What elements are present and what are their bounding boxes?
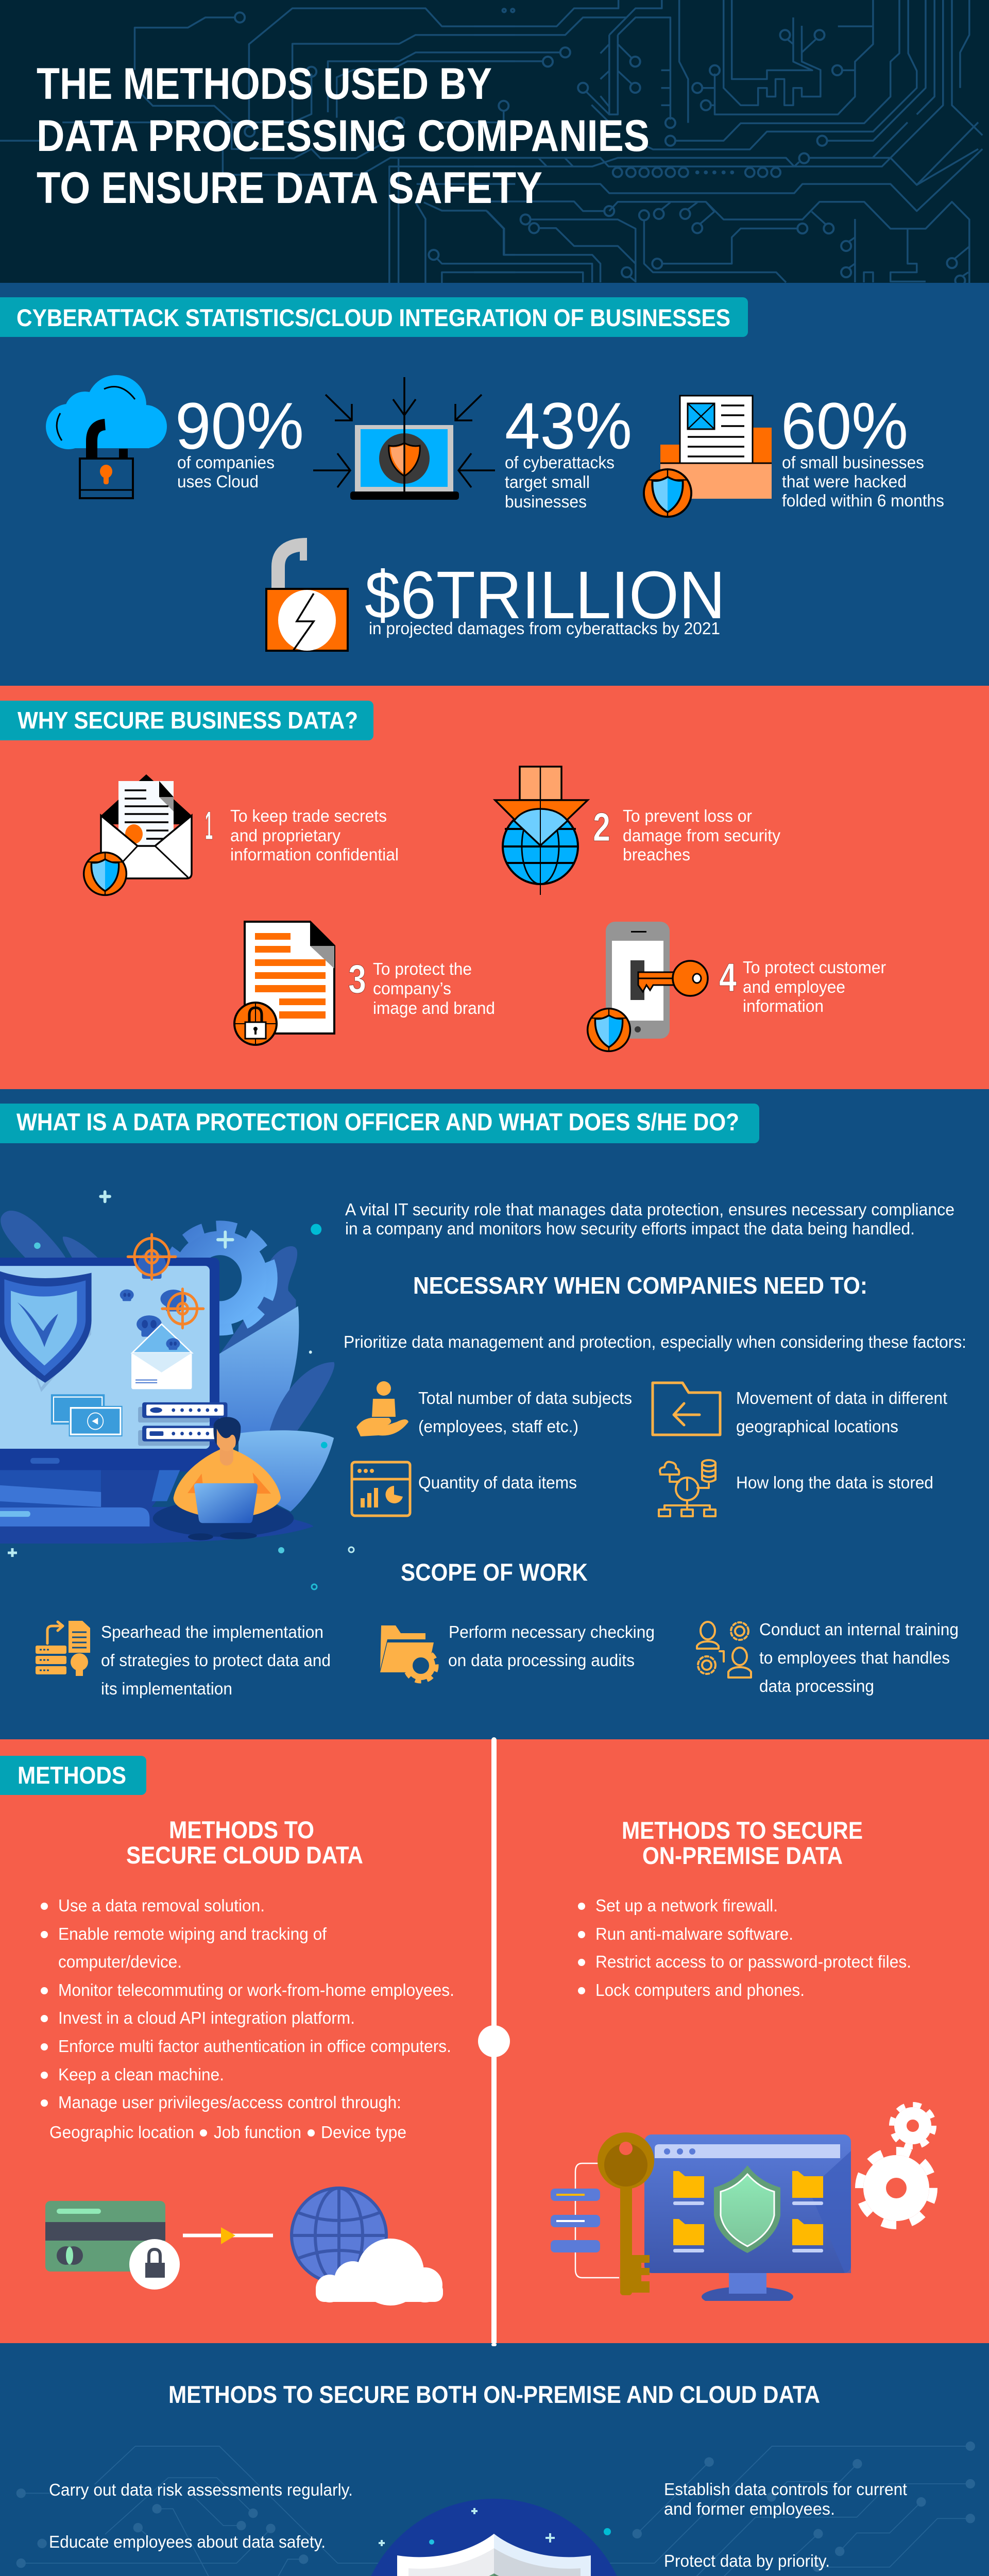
heading: methods to secure cloud data: SECURE CLOUD DATA xyxy=(126,1841,363,1869)
stat: $6 trillion: $6TRILLION xyxy=(365,557,725,633)
list: on-premise methods: Set up a network firewall. xyxy=(595,1896,778,1915)
heading: scope of work: SCOPE OF WORK xyxy=(401,1558,588,1586)
reason 4: and employee xyxy=(743,977,845,996)
factor: how long: How long the data is stored xyxy=(736,1473,933,1492)
heading: why secure banner xyxy=(0,701,373,740)
reason 4: information xyxy=(743,996,824,1015)
reason 2: breaches xyxy=(623,845,690,864)
icon: open padlock with lightning xyxy=(266,540,348,651)
reason 1: and proprietary xyxy=(230,826,340,845)
reason 4: 4 xyxy=(719,955,737,1000)
reason 3: 3 xyxy=(348,956,366,1002)
list: cloud data methods: Keep a clean machine. xyxy=(58,2065,224,2084)
heading: cyberattack statistics banner xyxy=(0,297,748,337)
list: cloud data methods: Monitor telecommuting or work-from-home employees. xyxy=(58,1980,454,1999)
heading: methods to secure both: METHODS TO SECURE BOTH ON-PREMISE AND CLOUD DATA xyxy=(168,2381,820,2408)
heading: data protection officer banner: WHAT IS A DATA PROTECTION OFFICER AND WHAT DOES S/HE DO? xyxy=(16,1108,739,1136)
reason 2: To prevent loss or xyxy=(623,806,752,825)
heading: cyberattack statistics banner: CYBERATTACK STATISTICS/CLOUD INTEGRATION OF BUSINESSES xyxy=(16,304,730,331)
icon: laptop under attack xyxy=(313,377,495,500)
text: role description: in a company and monitors how security efforts impact the data being handled. xyxy=(345,1219,915,1238)
reason 4 xyxy=(719,955,886,1015)
list: cloud data methods: Use a data removal solution. xyxy=(58,1896,265,1915)
heading: methods to secure cloud data xyxy=(126,1816,363,1869)
scope item: spearhead: its implementation xyxy=(101,1679,232,1698)
reason 1: To keep trade secrets xyxy=(230,806,387,825)
reason 4: To protect customer xyxy=(743,958,886,977)
reason 1: information confidential xyxy=(230,845,399,864)
list: on-premise methods xyxy=(578,1896,911,1999)
factor: quantity: Quantity of data items xyxy=(418,1473,577,1492)
heading: methods to secure on-premise data: ON-PREMISE DATA xyxy=(642,1842,843,1869)
stat: 90%: 90% xyxy=(175,389,304,463)
reason 1 xyxy=(205,803,399,864)
list: cloud data methods: Manage user privileges/access control through: xyxy=(58,2093,401,2112)
heading: methods to secure on-premise data: METHODS TO SECURE xyxy=(622,1817,863,1844)
list: cloud data methods: Enable remote wiping and tracking of xyxy=(58,1924,327,1943)
reason 3: image and brand xyxy=(373,998,495,1018)
factor: data subjects xyxy=(418,1388,632,1436)
icon: hacked document xyxy=(644,396,772,517)
scope item: internal training: to employees that handles xyxy=(759,1648,950,1667)
text: role description: A vital IT security role that manages data protection, ensures necessary compliance xyxy=(345,1200,954,1219)
text: role description xyxy=(345,1200,954,1238)
scope item: internal training: data processing xyxy=(759,1676,874,1696)
stat: 43% xyxy=(505,389,632,511)
stat: 60%: folded within 6 months xyxy=(782,491,944,510)
panel: methods for both on-premise and cloud data xyxy=(0,2343,989,2576)
stat: 43%: 43% xyxy=(505,389,632,463)
heading: methods banner xyxy=(0,1756,146,1795)
stat: 43%: of cyberattacks xyxy=(505,453,615,472)
scope item: perform checking: on data processing audits xyxy=(448,1651,635,1670)
scope item: perform checking: Perform necessary checking xyxy=(449,1622,655,1641)
icon: network with clock xyxy=(659,1460,715,1516)
text: prioritize: Prioritize data management and protection, especially when considering these factors: xyxy=(344,1332,966,1351)
scope item: internal training xyxy=(759,1620,959,1696)
illustration: central shield xyxy=(356,2499,632,2576)
list: on-premise methods: Restrict access to or password-protect files. xyxy=(595,1952,911,1971)
stat: 43%: target small xyxy=(505,472,590,492)
illustration: officer at monitor with shield xyxy=(0,1192,334,1546)
reason 3: To protect the xyxy=(373,959,472,978)
stat: 90%: uses Cloud xyxy=(177,472,259,491)
factor: data subjects: Total number of data subjects xyxy=(418,1388,632,1408)
list: cloud data methods: Job function xyxy=(214,2123,301,2142)
list: left methods xyxy=(49,2480,363,2576)
stat: 60%: of small businesses xyxy=(782,453,924,472)
list: left methods: Educate employees about data safety. xyxy=(49,2532,326,2551)
reason 1: 1 xyxy=(205,803,213,848)
reason 3 xyxy=(348,956,495,1018)
list: cloud data methods: Enforce multi factor authentication in office computers. xyxy=(58,2037,451,2056)
list: right methods: Protect data by priority. xyxy=(664,2551,830,2570)
heading: methods to secure cloud data: METHODS TO xyxy=(169,1816,314,1843)
factor: movement of data: Movement of data in different xyxy=(736,1388,947,1408)
stat: 60%: 60% xyxy=(781,389,908,463)
heading: data protection officer banner xyxy=(0,1104,759,1143)
stat: 60% xyxy=(781,389,944,510)
list: cloud data methods: Geographic location xyxy=(49,2123,194,2142)
stat: 60%: that were hacked xyxy=(782,472,907,491)
illustration: card to cloud xyxy=(45,2188,443,2306)
illustration: secure monitor with key and gears xyxy=(551,2105,934,2308)
stat: 90%: of companies xyxy=(177,453,275,472)
stat: 43%: businesses xyxy=(505,492,587,511)
reason 2: 2 xyxy=(593,804,610,850)
list: right methods xyxy=(664,2480,912,2576)
heading: methods to secure on-premise data xyxy=(622,1817,863,1869)
icon: document with lock xyxy=(234,922,334,1045)
list: left methods: Carry out data risk assessments regularly. xyxy=(49,2480,353,2499)
icon: people and gears xyxy=(697,1622,751,1677)
title: THE METHODS USED BY xyxy=(37,59,492,109)
reason 2 xyxy=(593,804,780,864)
icon: person on hand xyxy=(356,1381,408,1436)
heading: methods banner: METHODS xyxy=(18,1761,126,1789)
icon: phone with key xyxy=(588,922,708,1051)
list: on-premise methods: Run anti-malware software. xyxy=(595,1924,793,1943)
icon: strategy server and bulb xyxy=(36,1621,90,1676)
divider with circle xyxy=(478,1737,510,2346)
list: cloud data methods: Invest in a cloud API integration platform. xyxy=(58,2008,355,2027)
list: cloud data methods xyxy=(41,1896,454,2142)
factor: movement of data xyxy=(736,1388,947,1436)
factor: data subjects: (employees, staff etc.) xyxy=(418,1417,578,1436)
heading: necessary when companies need to: NECESSARY WHEN COMPANIES NEED TO: xyxy=(413,1272,867,1299)
reason 2: damage from security xyxy=(623,826,780,845)
scope item: internal training: Conduct an internal training xyxy=(759,1620,959,1639)
icon: cloud with padlock xyxy=(46,375,167,498)
title xyxy=(37,59,650,213)
icon: folder with gear xyxy=(380,1625,437,1682)
scope item: spearhead: of strategies to protect data and xyxy=(101,1651,331,1670)
stat: $6 trillion: in projected damages from cyberattacks by 2021 xyxy=(369,619,720,638)
scope item: spearhead: Spearhead the implementation xyxy=(101,1622,323,1641)
list: cloud data methods: computer/device. xyxy=(58,1952,182,1971)
panel: why secure business data xyxy=(0,686,989,1089)
list: on-premise methods: Lock computers and phones. xyxy=(595,1980,805,1999)
icon: folder with arrow xyxy=(653,1383,720,1435)
reason 3: company’s xyxy=(373,979,451,998)
scope item: perform checking xyxy=(448,1622,655,1670)
icon: envelope with document xyxy=(84,774,192,895)
title: TO ENSURE DATA SAFETY xyxy=(37,163,542,213)
list: right methods: and former employees. xyxy=(664,2499,835,2518)
heading: why secure banner: WHY SECURE BUSINESS DATA? xyxy=(18,707,358,734)
list: right methods: Establish data controls for current xyxy=(664,2480,907,2499)
icon: window with chart xyxy=(352,1462,410,1516)
list: cloud data methods: Device type xyxy=(321,2123,406,2142)
icon: globe with box xyxy=(495,767,588,895)
panel: cyberattack statistics xyxy=(0,283,989,686)
title: DATA PROCESSING COMPANIES xyxy=(37,111,650,161)
scope item: spearhead xyxy=(101,1622,331,1698)
panel: methods xyxy=(0,1737,989,2346)
panel: header xyxy=(0,0,989,285)
panel: data protection officer xyxy=(0,1104,965,1698)
factor: movement of data: geographical locations xyxy=(736,1417,898,1436)
